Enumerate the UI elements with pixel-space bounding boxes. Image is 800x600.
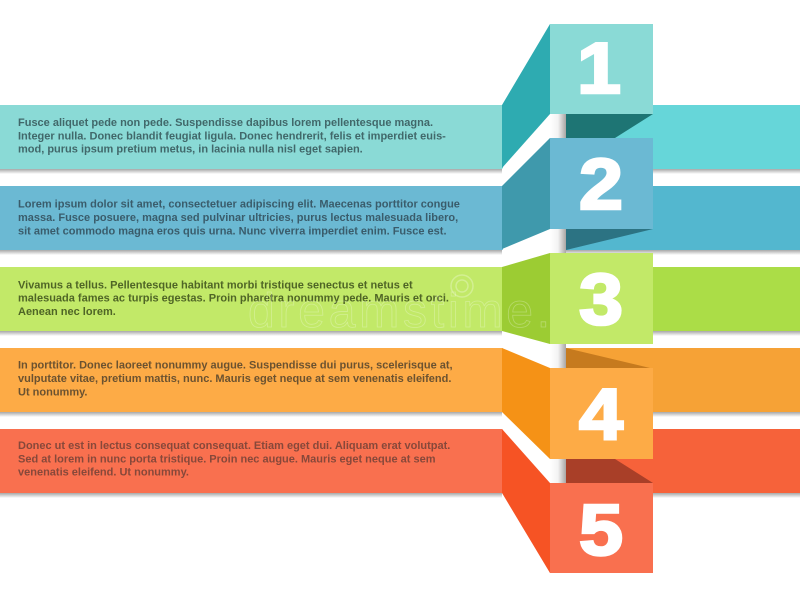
ribbon 1 xyxy=(0,105,800,174)
ribbon 4: In porttitor. Donec laoreet nonummy augue. Suspendisse dui purus, scelerisque at, xyxy=(18,360,453,372)
box 2: 2 xyxy=(579,144,623,225)
box 2 xyxy=(502,138,653,249)
ribbon 2 xyxy=(0,186,800,255)
box 5 xyxy=(502,429,653,573)
ribbon 3: Aenean nec lorem. xyxy=(18,306,116,318)
ribbon 2: massa. Fusce posuere, magna sed pulvinar ultricies, purus lectus malesuada libero, xyxy=(18,212,458,224)
ribbon 1: mod, purus ipsum pretium metus, in lacinia nulla nisl eget sapien. xyxy=(18,144,363,156)
box 4 xyxy=(502,348,653,459)
box 4: 4 xyxy=(579,374,623,455)
box 1: 1 xyxy=(577,28,621,109)
box 1 xyxy=(502,24,653,168)
under-fold 1 xyxy=(566,114,653,138)
ribbon 2: sit amet commodo magna eros quis urna. Nunc viverra imperdiet enim. Fusce est. xyxy=(18,225,447,237)
ribbon 5: Sed at lorem in nunc porta tristique. Proin nec augue. Mauris eget neque at sem xyxy=(18,453,436,465)
watermark: dreamstime. xyxy=(248,285,554,338)
ribbon 5 xyxy=(0,429,800,498)
top-fold 4 xyxy=(566,348,650,368)
ribbon 2: Lorem ipsum dolor sit amet, consectetuer adipiscing elit. Maecenas porttitor congue xyxy=(18,199,460,211)
box 5: 5 xyxy=(579,490,623,571)
ribbon 4: vulputate vitae, pretium mattis, nunc. Mauris eget neque at sem venenatis eleifend. xyxy=(18,373,451,385)
connector gap shadows xyxy=(502,114,566,483)
ribbon 5: venenatis eleifend. Ut nonummy. xyxy=(18,467,189,479)
top-fold 5 xyxy=(566,459,653,483)
ribbon 3: malesuada fames ac turpis egestas. Proin pharetra nonummy pede. Mauris et orci. xyxy=(18,293,449,305)
ribbon 4 xyxy=(0,348,800,417)
ribbon 3 xyxy=(0,267,800,336)
under-fold 2 xyxy=(566,229,653,250)
box 3: 3 xyxy=(579,259,623,340)
ribbon 5: Donec ut est in lectus consequat consequat. Etiam eget dui. Aliquam erat volutpat. xyxy=(18,440,450,452)
ribbon 1: Integer nulla. Donec blandit feugiat ligula. Donec hendrerit, felis et imperdiet euis- xyxy=(18,130,446,142)
ribbon 3: Vivamus a tellus. Pellentesque habitant morbi tristique senectus et netus et xyxy=(18,279,413,291)
ribbon 1: Fusce aliquet pede non pede. Suspendisse dapibus lorem pellentesque magna. xyxy=(18,117,433,129)
box 3 xyxy=(502,253,653,344)
ribbon 4: Ut nonummy. xyxy=(18,386,87,398)
